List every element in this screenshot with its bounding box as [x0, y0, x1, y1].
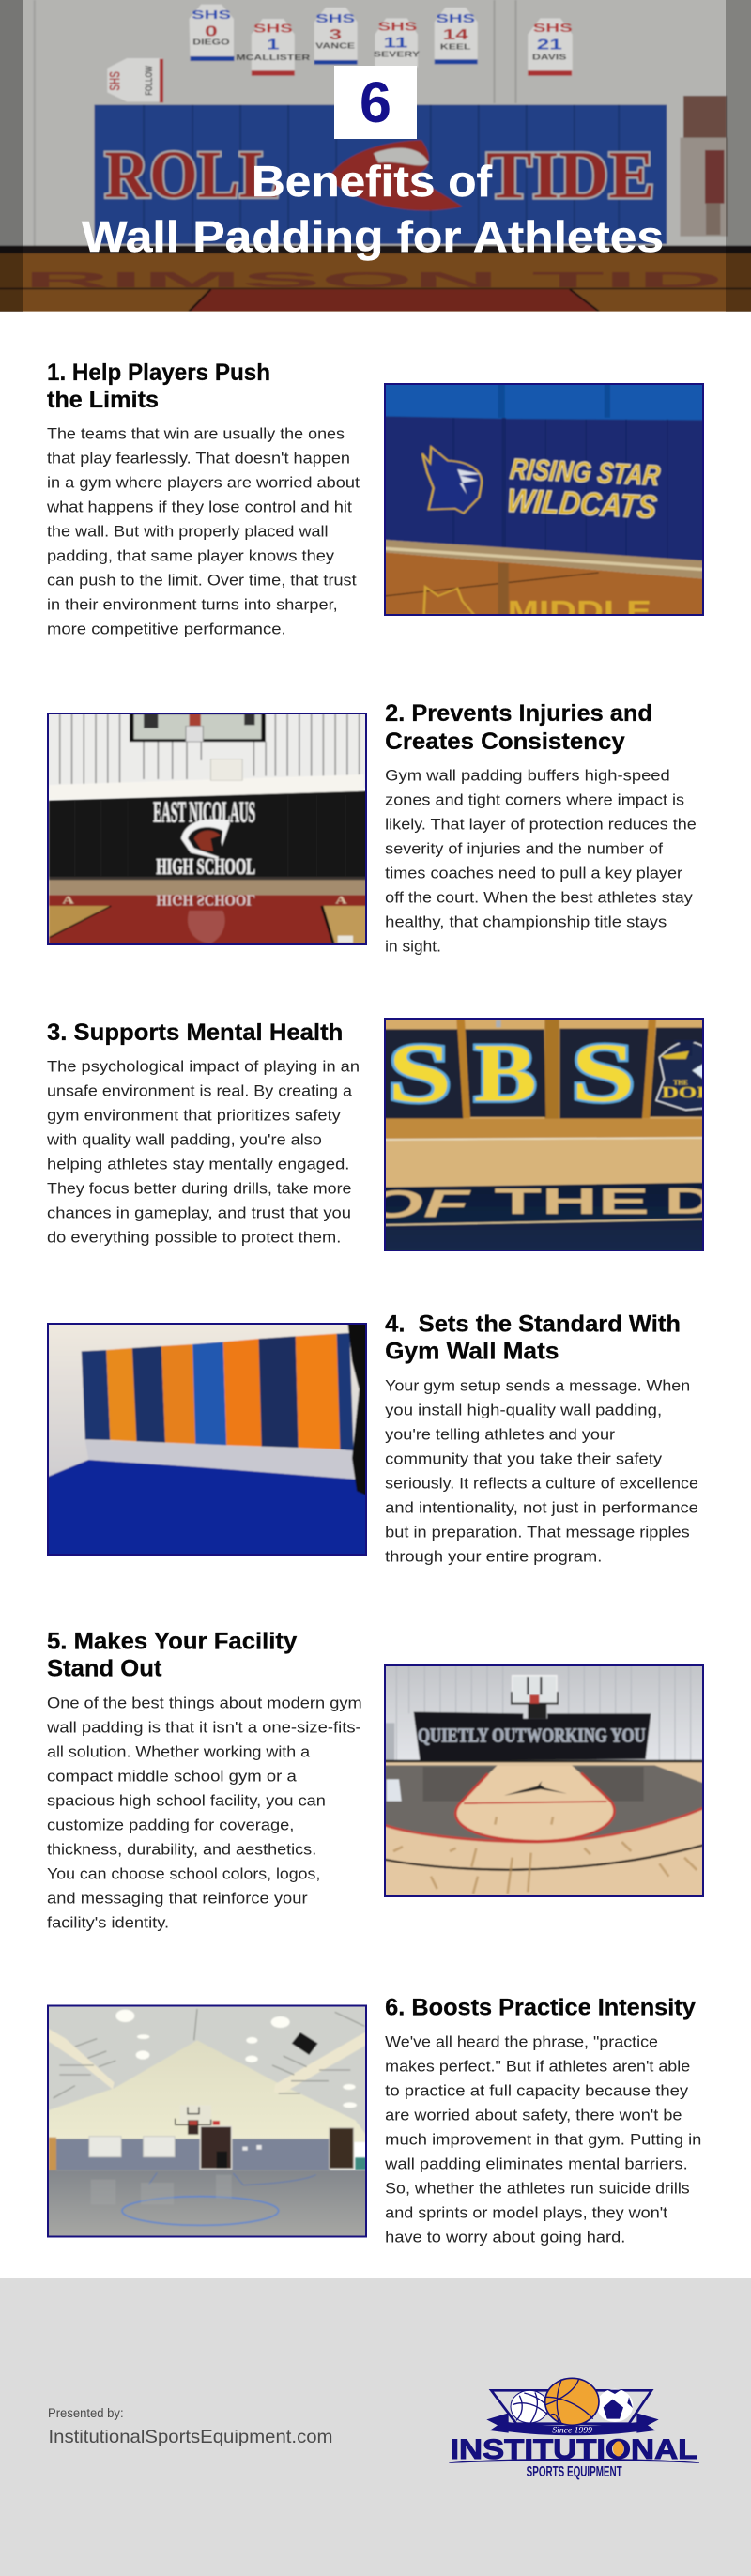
- icon: basketball: [545, 2378, 599, 2425]
- wordmark: [450, 2434, 697, 2480]
- text block: benefit 6: We've all heard the phrase, "practice: [385, 2032, 658, 2050]
- hero photo: gym wall with Roll Tide padding: KEEL: [440, 43, 471, 52]
- photo: East Nicolaus High School wall pad: HIGH SCHOOL: [156, 853, 255, 879]
- presented by text: [48, 2406, 332, 2447]
- hero photo: gym wall with Roll Tide padding: SHS: [192, 8, 231, 22]
- wordmark: SPORTS EQUIPMENT: [527, 2464, 622, 2480]
- heading: benefit 5: Stand Out: [47, 1655, 162, 1681]
- text block: benefit 4: but in preparation. That message ripples: [385, 1523, 690, 1541]
- photo: East Nicolaus High School wall pad: HIGH SCHOOL: [156, 891, 255, 909]
- text block: benefit 5: spacious high school facility, you can: [47, 1791, 326, 1809]
- footer panel: [0, 2278, 751, 2576]
- text block: benefit 2: [385, 766, 697, 955]
- hero photo: gym wall with Roll Tide padding: 1: [267, 37, 280, 54]
- photo: East Nicolaus High School wall pad: A: [62, 895, 74, 906]
- number badge: [334, 66, 417, 139]
- logo: Institutional Sports Equipment: [449, 2378, 699, 2480]
- photo: SBS wall pads and floor lettering: OF: [364, 1182, 471, 1225]
- photo: East Nicolaus High School wall pad: [47, 713, 367, 945]
- text block: benefit 2: severity of injuries and the number of: [385, 839, 664, 857]
- heading: benefit 4: Gym Wall Mats: [385, 1339, 559, 1365]
- hero photo: gym wall with Roll Tide padding: SHS: [378, 19, 417, 34]
- text block: benefit 6: much improvement in that gym. Putting in: [385, 2130, 701, 2148]
- hero photo: gym wall with Roll Tide padding: 3: [329, 26, 342, 43]
- heading: benefit 1: [47, 360, 270, 413]
- text block: benefit 4: Your gym setup sends a message. When: [385, 1376, 690, 1394]
- panel: benefit 5: [46, 1629, 706, 1931]
- text block: benefit 2: zones and tight corners where impact is: [385, 790, 684, 808]
- title: [82, 157, 664, 261]
- text block: benefit 5: customize padding for coverage,: [47, 1816, 294, 1833]
- text block: benefit 1: [46, 424, 360, 637]
- heading: benefit 2: [385, 700, 652, 755]
- hero photo: gym wall with Roll Tide padding: [0, 0, 751, 316]
- banner: [486, 2413, 659, 2435]
- icon: triangle frame: [491, 2390, 651, 2424]
- wave mark: [330, 140, 462, 210]
- text block: benefit 3: chances in gameplay, and trust that you: [47, 1204, 351, 1222]
- hero photo: gym wall with Roll Tide padding: FOLLOW: [144, 66, 156, 96]
- pad lettering: ROLL: [104, 138, 281, 212]
- presented by text: Presented by:: [48, 2406, 124, 2420]
- text block: benefit 2: Gym wall padding buffers high-speed: [385, 766, 670, 784]
- text block: benefit 5: and messaging that reinforce your: [47, 1889, 308, 1907]
- text block: benefit 1: in a gym where players are worried about: [47, 473, 360, 491]
- text block: benefit 4: you install high-quality wall padding,: [385, 1401, 662, 1418]
- text block: benefit 5: [46, 1694, 362, 1931]
- text block: benefit 3: helping athletes stay mentally engaged.: [47, 1156, 349, 1173]
- dark side strips of the hero: [0, 0, 751, 312]
- text block: benefit 1: in their environment turns into sharper,: [47, 595, 338, 613]
- pad lettering: TIDE: [486, 138, 654, 213]
- photo: SBS wall pads and floor lettering: B: [474, 1026, 537, 1119]
- hero photo: gym wall with Roll Tide padding: 11: [383, 35, 407, 52]
- banner: Since 1999: [552, 2426, 593, 2435]
- text block: benefit 4: seriously. It reflects a culture of excellence: [385, 1474, 698, 1492]
- text block: benefit 6: So, whether the athletes run suicide drills: [385, 2179, 690, 2197]
- text block: benefit 3: They focus better during drills, take more: [47, 1180, 351, 1198]
- photo: SBS wall pads and floor lettering: THE: [673, 1079, 688, 1087]
- text block: benefit 5: One of the best things about modern gym: [47, 1694, 362, 1711]
- text block: benefit 1: padding, that same player knows they: [47, 546, 335, 564]
- hero photo: gym wall with Roll Tide padding: SHS: [106, 71, 123, 91]
- text block: benefit 2: times coaches need to pull a key player: [385, 864, 683, 882]
- title: Wall Padding for Athletes: [82, 212, 664, 261]
- hero banner: [0, 0, 751, 316]
- number badge: 6: [360, 70, 391, 134]
- text block: benefit 1: that play fearlessly. That doesn't happen: [47, 449, 350, 467]
- title: Benefits of: [252, 157, 493, 206]
- text block: benefit 2: in sight.: [385, 937, 441, 955]
- heading: benefit 5: 5. Makes Your Facility: [47, 1629, 297, 1655]
- text block: benefit 3: do everything possible to protect them.: [47, 1229, 341, 1247]
- text block: benefit 3: The psychological impact of playing in an: [47, 1058, 360, 1076]
- text block: benefit 1: can push to the limit. Over time, that trust: [47, 571, 357, 589]
- heading: benefit 6: 6. Boosts Practice Intensity: [385, 1995, 696, 2021]
- text block: benefit 5: all solution. Whether working with a: [47, 1742, 311, 1760]
- text block: benefit 4: [385, 1376, 698, 1565]
- text block: benefit 6: to practice at full capacity because they: [385, 2081, 689, 2099]
- heading: benefit 4: [385, 1311, 681, 1365]
- photo: Rising Star Wildcats wall pad: [384, 383, 704, 628]
- hero photo: gym wall with Roll Tide padding: SHS: [253, 21, 293, 36]
- text block: benefit 1: what happens if they lose control and hit: [46, 498, 352, 515]
- text block: benefit 2: healthy, that championship title stays: [385, 912, 667, 930]
- text block: benefit 4: you're telling athletes and your: [385, 1425, 616, 1443]
- photo: SBS wall pads and floor lettering: DOI: [662, 1083, 706, 1101]
- photo: SBS wall pads and floor lettering: S: [388, 1027, 452, 1120]
- photo: SBS wall pads and floor lettering: S: [571, 1026, 636, 1119]
- text block: benefit 5: facility's identity.: [47, 1913, 169, 1931]
- panel: benefit 4: [47, 1311, 698, 1565]
- photo: Quietly Outworking You court: [384, 1664, 706, 1900]
- hero photo: gym wall with Roll Tide padding: 0: [205, 23, 218, 39]
- text block: benefit 6: are worried about safety, there won't be: [385, 2106, 682, 2124]
- panel: benefit 6: [47, 1995, 701, 2246]
- poster: [683, 96, 727, 143]
- text block: benefit 2: off the court. When the best athletes stay: [385, 888, 694, 906]
- heading: benefit 2: 2. Prevents Injuries and: [385, 700, 652, 727]
- hero photo: gym wall with Roll Tide padding: RIMSON TID: [24, 268, 723, 292]
- text block: benefit 3: with quality wall padding, you're also: [46, 1131, 322, 1149]
- photo: orange and navy wall mats: [47, 1323, 367, 1556]
- panel: benefit 2: [47, 700, 697, 955]
- text block: benefit 3: [46, 1058, 360, 1247]
- text block: benefit 6: wall padding eliminates mental barriers.: [384, 2154, 688, 2172]
- text block: benefit 3: unsafe environment is real. By creating a: [47, 1082, 353, 1100]
- panel: benefit 1: [46, 360, 704, 637]
- heading: benefit 5: [47, 1629, 297, 1681]
- photo: Rising Star Wildcats wall pad: MIDDLE: [508, 594, 651, 628]
- text block: benefit 4: through your entire program.: [385, 1547, 602, 1565]
- text block: benefit 5: wall padding is that it isn't a one-size-fits-: [46, 1718, 361, 1736]
- photo: SBS wall pads and floor lettering: D: [665, 1181, 714, 1221]
- heading: benefit 1: 1. Help Players Push: [47, 360, 270, 386]
- hero photo: gym wall with Roll Tide padding: 21: [537, 37, 562, 54]
- wordmark: INSTITUTIONAL: [450, 2434, 697, 2465]
- text block: benefit 6: and sprints or model plays, they won't: [385, 2203, 668, 2221]
- heading: benefit 1: the Limits: [47, 387, 159, 413]
- photo: SBS wall pads and floor lettering: [364, 1017, 714, 1251]
- hero photo: gym wall with Roll Tide padding: SHS: [436, 11, 475, 25]
- text block: benefit 3: gym environment that prioritizes safety: [47, 1107, 342, 1125]
- hero photo: gym wall with Roll Tide padding: SEVERY: [374, 51, 420, 59]
- blue wall pad: [95, 105, 667, 244]
- presented by text: InstitutionalSportsEquipment.com: [49, 2427, 332, 2447]
- hero photo: gym wall with Roll Tide padding: DIEGO: [192, 38, 230, 47]
- icon: volleyball: [511, 2390, 548, 2423]
- panel: benefit 3: [46, 1017, 714, 1251]
- text block: benefit 6: [384, 2032, 701, 2246]
- text block: benefit 6: have to worry about going hard.: [385, 2228, 625, 2246]
- hero photo: gym wall with Roll Tide padding: MCALLISTER: [236, 54, 311, 62]
- text block: benefit 5: You can choose school colors, logos,: [47, 1864, 320, 1882]
- hero photo: gym wall with Roll Tide padding: SHS: [315, 11, 355, 25]
- heading: benefit 2: Creates Consistency: [385, 728, 625, 755]
- text block: benefit 5: thickness, durability, and aesthetics.: [47, 1840, 316, 1858]
- text block: benefit 1: the wall. But with properly placed wall: [47, 522, 329, 540]
- text block: benefit 1: more competitive performance.: [47, 620, 286, 637]
- photo: East Nicolaus High School wall pad: A: [335, 895, 347, 906]
- text block: benefit 5: compact middle school gym or a: [47, 1767, 298, 1785]
- heading: benefit 4: 4. Sets the Standard With: [385, 1311, 681, 1337]
- text block: benefit 4: and intentionality, not just in performance: [385, 1498, 698, 1516]
- photo: Quietly Outworking You court: QUIETLY OUTWORKING YOU: [418, 1725, 646, 1746]
- text block: benefit 1: The teams that win are usually the ones: [47, 424, 345, 442]
- hero photo: gym wall with Roll Tide padding: 14: [443, 26, 468, 43]
- heading: benefit 3: 3. Supports Mental Health: [47, 1020, 343, 1046]
- pad lettering: [102, 148, 654, 201]
- jerseys: [107, 5, 573, 101]
- text block: benefit 2: likely. That layer of protection reduces the: [385, 815, 697, 833]
- hero photo: gym wall with Roll Tide padding: DAVIS: [532, 54, 567, 62]
- text block: benefit 4: community that you take their safety: [385, 1449, 663, 1467]
- icon: soccer ball: [597, 2389, 633, 2422]
- photo: gym with blue-gray wall padding: [47, 2004, 369, 2239]
- hero photo: gym wall with Roll Tide padding: VANCE: [315, 42, 355, 51]
- floor: [0, 246, 751, 253]
- photo: East Nicolaus High School wall pad: EAST NICOLAUS: [153, 795, 255, 828]
- photo: SBS wall pads and floor lettering: THE: [494, 1181, 650, 1222]
- text block: benefit 6: makes perfect." But if athletes aren't able: [385, 2057, 690, 2075]
- hero photo: gym wall with Roll Tide padding: SHS: [533, 21, 573, 35]
